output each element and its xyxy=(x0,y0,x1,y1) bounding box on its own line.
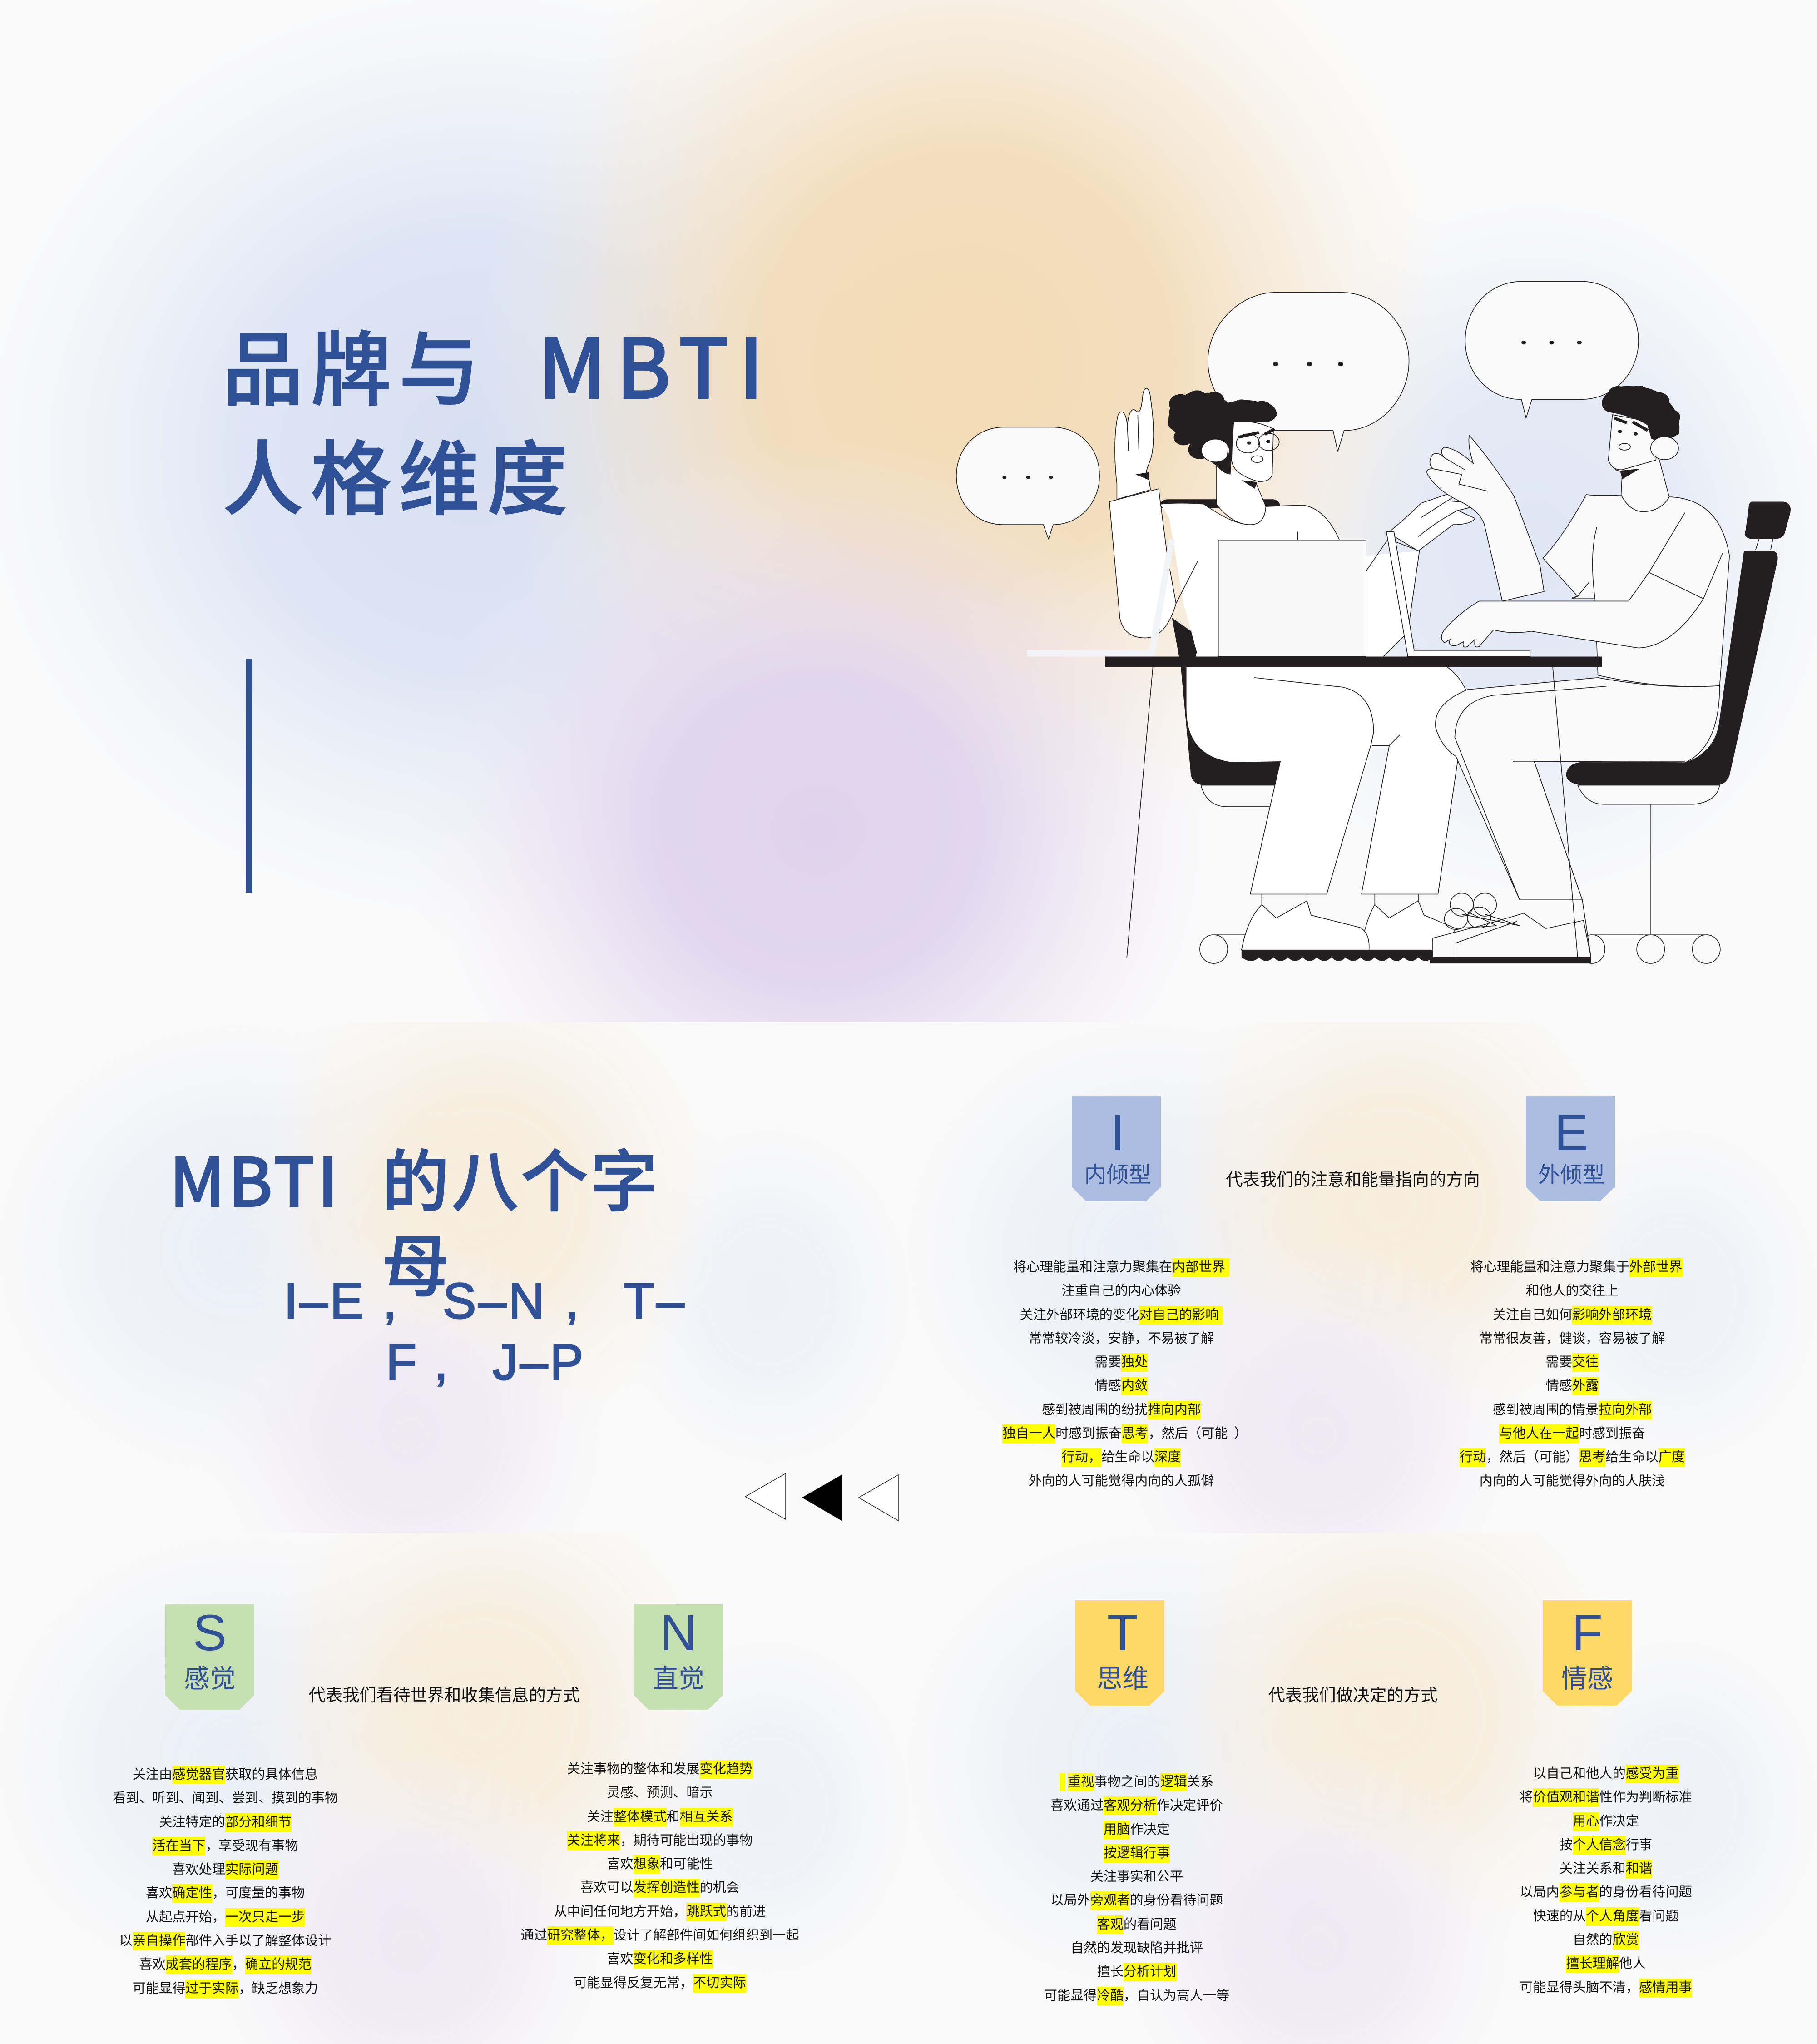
tag: N intuition: 直觉 xyxy=(653,1664,704,1693)
list: thinking traits: 关注事实和公平 xyxy=(1090,1870,1183,1884)
list: feeling traits: 自然的 xyxy=(1573,1933,1613,1947)
list: sensing traits: 喜欢 ，可度量的事物 xyxy=(146,1886,305,1900)
list: sensing traits xyxy=(21,1763,430,2000)
pair T-F start: T– xyxy=(624,1273,686,1329)
list: thinking traits: 冷酷 xyxy=(1097,1989,1124,2003)
tag: F feeling: F xyxy=(1572,1604,1603,1661)
panel: I and E xyxy=(1002,1096,1685,1487)
list: sensing traits: 喜欢 ， xyxy=(139,1957,245,1972)
list: extravert traits: 行动 xyxy=(1460,1450,1486,1464)
tag: S sensing: S xyxy=(193,1604,227,1661)
man shirt xyxy=(1543,495,1729,686)
list: thinking traits: 逻辑 xyxy=(1160,1775,1187,1789)
tag: T thinking: T xyxy=(1107,1604,1138,1661)
woman torso xyxy=(1160,503,1420,657)
woman hand at right xyxy=(1388,491,1475,551)
letter pairs xyxy=(272,1271,704,1380)
list: extravert traits: 情感 xyxy=(1546,1379,1572,1393)
list: sensing traits: 过于实际 xyxy=(185,1981,238,1996)
tag: N intuition xyxy=(634,1604,723,1710)
chair wheels and bases xyxy=(1200,804,1720,963)
shoelaces xyxy=(1444,893,1520,929)
list: feeling traits: 擅长理解 xyxy=(1566,1956,1619,1971)
laptop: centre xyxy=(1218,532,1366,657)
title line 1: 品牌与 MBTI xyxy=(223,303,773,422)
list: intuition traits: 相互关系 xyxy=(680,1810,733,1824)
list: feeling traits: 以局内 的身份看待问题 xyxy=(1520,1885,1692,1900)
tag: T thinking: 思维 xyxy=(1097,1664,1149,1693)
tag: S sensing xyxy=(165,1604,254,1710)
list: thinking traits: 可能显得 ，自认为高人一等 xyxy=(1044,1989,1229,2003)
list: sensing traits: 成套的程序 xyxy=(166,1957,232,1972)
list: intuition traits: 整体模式 xyxy=(614,1810,667,1824)
list: feeling traits: 个人角度 xyxy=(1586,1909,1639,1924)
list: introvert traits: 深度 xyxy=(1154,1450,1181,1464)
comma: , xyxy=(434,1335,451,1390)
list: feeling traits: 感情用事 xyxy=(1639,1980,1692,1995)
man face details xyxy=(1614,418,1648,450)
list: introvert traits: 感到被周围的纷扰 xyxy=(1042,1403,1148,1417)
laptop: left faint xyxy=(1027,539,1175,657)
list: sensing traits: 亲自操作 xyxy=(133,1934,185,1948)
tag: I introvert: I xyxy=(1110,1104,1125,1161)
woman neck and face xyxy=(1215,460,1266,525)
woman legs xyxy=(1187,667,1467,894)
person: man xyxy=(1427,386,1729,963)
speech bubble: right xyxy=(1465,281,1639,418)
list: extravert traits: ，然后（可能） 给生命以 xyxy=(1486,1450,1659,1464)
right chair xyxy=(1566,502,1791,804)
list: introvert traits: 行动， xyxy=(1062,1450,1101,1464)
list: sensing traits: 可能显得 ，缺乏想象力 xyxy=(133,1981,318,1996)
list: thinking traits xyxy=(932,1770,1341,2008)
arrows: three triangles xyxy=(740,1467,904,1526)
list: extravert traits: 外露 xyxy=(1572,1379,1599,1393)
woman raised sleeve xyxy=(1109,489,1176,638)
list: feeling traits: 按 行事 xyxy=(1560,1838,1652,1852)
list: introvert traits: 内敛 xyxy=(1121,1379,1148,1393)
caption: attention and energy: 代表我们的注意和能量指向的方向 xyxy=(1226,1170,1480,1189)
panel: cover title slide xyxy=(0,0,1817,1022)
list: sensing traits: 从起点开始， xyxy=(146,1910,225,1925)
tag: F feeling xyxy=(1543,1600,1632,1706)
panel: S and N xyxy=(0,0,908,2044)
list: sensing traits: 部分和细节 xyxy=(225,1815,292,1830)
list: intuition traits: 关注 和 xyxy=(587,1810,680,1824)
list: extravert traits: 关注自己如何 xyxy=(1493,1308,1572,1322)
list: thinking traits: 分析计划 xyxy=(1124,1965,1177,1979)
vertical accent bar xyxy=(246,659,252,893)
list: thinking traits: 旁观者 xyxy=(1090,1893,1130,1908)
pair J-P: J–P xyxy=(493,1335,586,1390)
list: sensing traits: 实际问题 xyxy=(225,1862,278,1877)
list: feeling traits: 参与者 xyxy=(1560,1885,1599,1900)
list: thinking traits: 自然的发现缺陷并批评 xyxy=(1070,1941,1203,1955)
list: introvert traits: 将心理能量和注意力聚集在 xyxy=(1013,1260,1172,1275)
list: intuition traits: 关注事物的整体和发展 xyxy=(567,1762,700,1776)
list: introvert traits: 给生命以 xyxy=(1101,1450,1154,1464)
list: intuition traits: 跳跃式 xyxy=(686,1905,726,1919)
list: intuition traits: 变化和多样性 xyxy=(634,1952,713,1966)
list: intuition traits: 喜欢 xyxy=(607,1952,634,1966)
list: sensing traits: 以 部件入手以了解整体设计 xyxy=(119,1934,332,1948)
list: intuition traits: 喜欢 和可能性 xyxy=(607,1857,713,1871)
list: extravert traits: 需要 xyxy=(1546,1355,1572,1369)
list: thinking traits: 以局外 的身份看待问题 xyxy=(1050,1893,1223,1908)
list: introvert traits: 内部世界 xyxy=(1172,1260,1225,1275)
list: thinking traits: 重视 xyxy=(1068,1775,1094,1789)
tag: I introvert: 内倾型 xyxy=(1084,1163,1151,1187)
list: extravert traits: 常常很友善，健谈，容易被了解 xyxy=(1480,1331,1665,1346)
heading: the eight letters (wrapping): 的八个字母 xyxy=(382,1127,660,1310)
list: thinking traits: 客观分析 xyxy=(1104,1798,1157,1813)
tag: I introvert xyxy=(1072,1096,1161,1201)
list: extravert traits: 感到被周围的情景 xyxy=(1493,1403,1599,1417)
list: introvert traits xyxy=(917,1255,1326,1493)
list: introvert traits: 对自己的影响 xyxy=(1139,1308,1218,1322)
list: intuition traits: 研究整体， xyxy=(547,1928,614,1943)
woman shoes xyxy=(1262,894,1418,905)
list: sensing traits: 确定性 xyxy=(172,1886,212,1900)
list: intuition traits: 变化趋势 xyxy=(700,1762,753,1776)
list: thinking traits: 事物之间的 关系 xyxy=(1094,1775,1213,1789)
list: feeling traits: 价值观和谐 xyxy=(1533,1790,1599,1805)
list: feeling traits: 快速的从 看问题 xyxy=(1533,1909,1679,1924)
list: introvert traits: 需要 xyxy=(1095,1355,1121,1369)
list: extravert traits: 与他人在一起 xyxy=(1499,1426,1579,1441)
speech bubble: middle xyxy=(1208,293,1409,451)
list: feeling traits: 他人 xyxy=(1619,1956,1646,1971)
tag: N intuition: N xyxy=(660,1604,697,1661)
list: introvert traits: 独自一人 xyxy=(1002,1426,1055,1441)
list: feeling traits: 作决定 xyxy=(1599,1814,1639,1829)
table top xyxy=(1105,657,1602,667)
caption: perceiving the world: 代表我们看待世界和收集信息的方式 xyxy=(309,1686,579,1705)
list: introvert traits: 情感 xyxy=(1095,1379,1121,1393)
list: intuition traits: 灵感、预测、暗示 xyxy=(607,1786,713,1800)
panel: MBTI eight letters xyxy=(0,1022,908,1533)
list: extravert traits: 时感到振奋 xyxy=(1579,1426,1645,1441)
list: thinking traits: 的看问题 xyxy=(1124,1917,1177,1932)
list: thinking traits: 作决定 xyxy=(1130,1822,1170,1837)
list: sensing traits: 活在当下 xyxy=(152,1839,205,1853)
man legs xyxy=(1436,678,1720,900)
comma: , xyxy=(383,1273,399,1329)
man lower arm xyxy=(1441,572,1703,648)
list: intuition traits: 关注将来 xyxy=(567,1833,620,1848)
title line 2: 人格维度 xyxy=(223,415,575,531)
caption: making decisions: 代表我们做决定的方式 xyxy=(1268,1686,1437,1705)
list: sensing traits: ，享受现有事物 xyxy=(205,1839,298,1853)
list: feeling traits: 用心 xyxy=(1573,1814,1599,1829)
list: sensing traits: 看到、听到、闻到、尝到、摸到的事物 xyxy=(113,1791,338,1806)
man raised arm and hand xyxy=(1427,435,1544,601)
cover title xyxy=(223,313,767,522)
list: intuition traits: 喜欢可以 的机会 xyxy=(580,1880,739,1895)
list: intuition traits: 不切实际 xyxy=(693,1976,746,1990)
list: extravert traits: 和他人的交往上 xyxy=(1526,1284,1619,1298)
list: feeling traits: 将 性作为判断标准 xyxy=(1520,1790,1692,1805)
list: sensing traits: 关注特定的 xyxy=(159,1815,225,1830)
list: thinking traits: 按逻辑行事 xyxy=(1104,1846,1170,1860)
woman curly hair xyxy=(1168,390,1277,475)
list: thinking traits: 喜欢通过 作决定评价 xyxy=(1050,1798,1223,1813)
list: introvert traits: 注重自己的内心体验 xyxy=(1062,1284,1181,1298)
list: feeling traits: 可能显得头脑不清， xyxy=(1520,1980,1639,1995)
list: extravert traits: 外部世界 xyxy=(1629,1260,1682,1275)
woman raised hand xyxy=(1115,388,1154,499)
list: intuition traits: 想象 xyxy=(634,1857,660,1871)
list: introvert traits: 独处 xyxy=(1121,1355,1148,1369)
list: extravert traits: 思考 xyxy=(1579,1450,1605,1464)
man hair xyxy=(1602,386,1680,443)
heading: MBTI: MBTI xyxy=(169,1128,341,1226)
list: introvert traits: 思考 xyxy=(1122,1426,1148,1441)
illustration: two people talking at a table xyxy=(908,250,1817,999)
tag: E extravert: 外倾型 xyxy=(1538,1163,1605,1187)
list: extravert traits xyxy=(1368,1255,1777,1493)
list: introvert traits: 常常较冷淡，安静，不易被了解 xyxy=(1029,1331,1214,1346)
panel: T and F xyxy=(908,0,1817,2044)
list: intuition traits: 发挥创造性 xyxy=(634,1880,700,1895)
list: feeling traits: 关注关系和 xyxy=(1560,1861,1626,1876)
list: feeling traits: 个人信念 xyxy=(1573,1838,1626,1852)
pair I-E: I–E xyxy=(284,1273,366,1329)
tag: E extravert xyxy=(1526,1096,1615,1201)
speech bubble: left xyxy=(956,427,1099,539)
list: sensing traits: 确立的规范 xyxy=(245,1957,312,1972)
list: feeling traits: 感受为重 xyxy=(1626,1766,1679,1781)
tag: S sensing: 感觉 xyxy=(184,1664,236,1693)
list: sensing traits: 关注由 获取的具体信息 xyxy=(133,1767,318,1782)
list: intuition traits: ，期待可能出现的事物 xyxy=(620,1833,753,1848)
list: intuition traits: 从中间任何地方开始， 的前进 xyxy=(554,1905,766,1919)
list: intuition traits: 可能显得反复无常， xyxy=(574,1976,693,1990)
list: extravert traits: 内向的人可能觉得外向的人肤浅 xyxy=(1480,1474,1665,1488)
list: sensing traits: 感觉器官 xyxy=(172,1767,225,1782)
tag: T thinking xyxy=(1075,1600,1164,1706)
tag: F feeling: 情感 xyxy=(1561,1664,1613,1693)
woman glasses xyxy=(1236,429,1279,462)
list: thinking traits: 用脑 xyxy=(1104,1822,1130,1837)
man shoes xyxy=(1433,913,1591,957)
list: intuition traits: 通过 设计了解部件间如何组织到一起 xyxy=(521,1928,799,1943)
list: introvert traits: 关注外部环境的变化 xyxy=(1020,1308,1139,1322)
pair T-F end: F xyxy=(386,1335,419,1390)
laptop: right xyxy=(1386,532,1530,657)
list: introvert traits: 外向的人可能觉得内向的人孤僻 xyxy=(1029,1474,1214,1488)
left chair xyxy=(1160,499,1280,807)
list: feeling traits: 以自己和他人的 xyxy=(1533,1766,1626,1781)
list: sensing traits: 一次只走一步 xyxy=(225,1910,305,1925)
list: introvert traits: 推向内部 xyxy=(1148,1403,1201,1417)
list: introvert traits: 时感到振奋 ，然后（可能 ） xyxy=(1055,1426,1248,1441)
list: extravert traits: 交往 xyxy=(1572,1355,1599,1369)
list: extravert traits: 拉向外部 xyxy=(1599,1403,1652,1417)
list: extravert traits: 将心理能量和注意力聚集于 xyxy=(1470,1260,1629,1275)
list: extravert traits: 影响外部环境 xyxy=(1572,1308,1652,1322)
list: thinking traits: 擅长 xyxy=(1097,1965,1124,1979)
list: feeling traits: 欣赏 xyxy=(1613,1933,1639,1947)
man neck and face xyxy=(1615,451,1669,512)
table legs xyxy=(1127,667,1591,958)
list: intuition traits xyxy=(455,1757,864,1995)
tag: E extravert: E xyxy=(1555,1104,1588,1161)
pair S-N: S–N xyxy=(443,1273,547,1329)
list: feeling traits: 和谐 xyxy=(1626,1861,1652,1876)
comma: , xyxy=(565,1273,581,1329)
list: feeling traits xyxy=(1401,1762,1810,1999)
list: thinking traits: 客观 xyxy=(1097,1917,1124,1932)
list: extravert traits: 广度 xyxy=(1659,1450,1685,1464)
person: woman with glasses xyxy=(1109,388,1475,961)
list: sensing traits: 喜欢处理 xyxy=(172,1862,225,1877)
